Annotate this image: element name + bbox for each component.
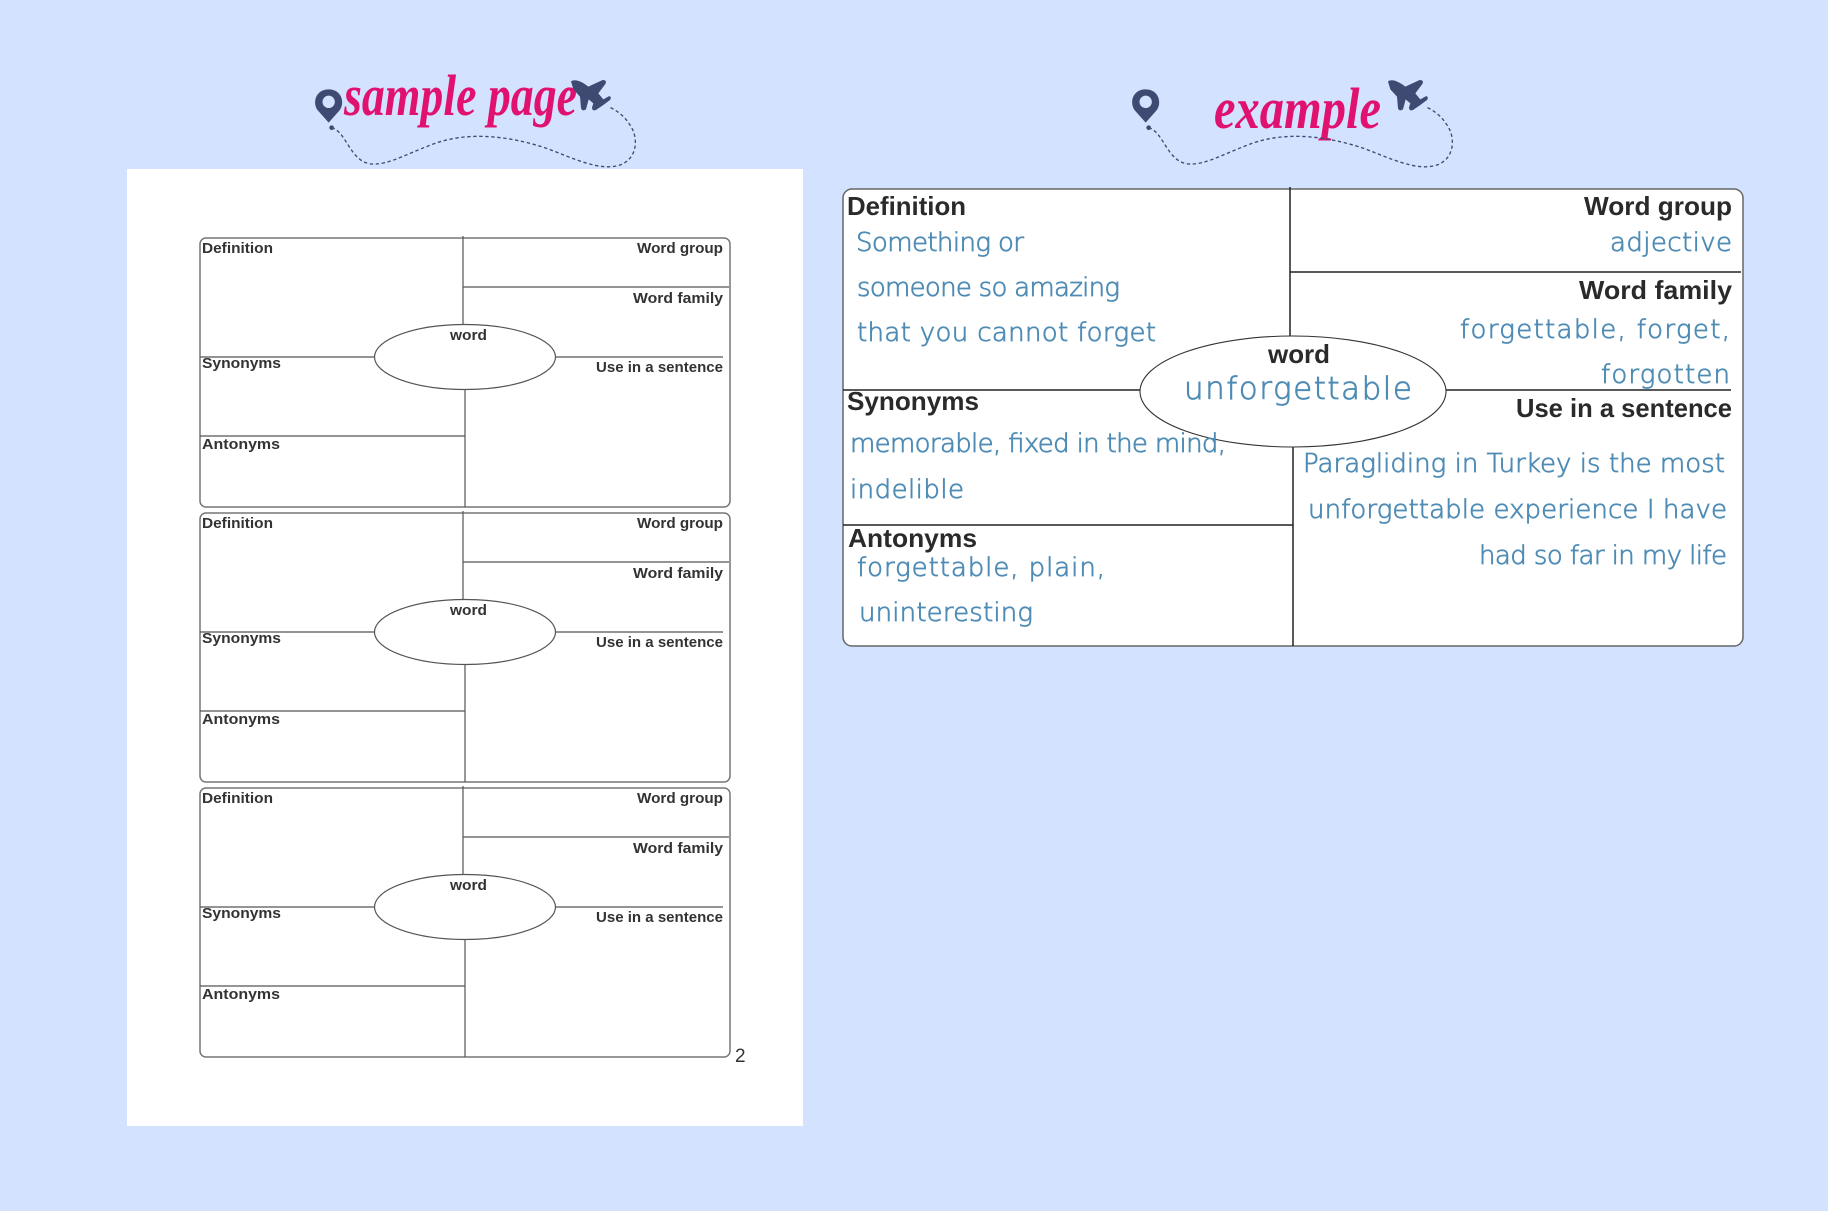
worksheet form 1: Word family [633,290,724,307]
worksheet form 1: word [449,327,487,344]
title: example: example [1214,76,1381,141]
section: word family: forgotten [1601,360,1730,390]
section: antonyms: uninteresting [859,598,1033,628]
worksheet form 2: Word family [633,565,724,582]
worksheet form 3: Antonyms [202,986,280,1003]
section: word group [1584,191,1732,258]
section: word family: Word family [1579,275,1733,305]
section: word family: forgettable, forget, [1460,315,1730,345]
section: definition [847,191,1156,348]
worksheet form 3 [200,786,730,1057]
worksheet form 2: Use in a sentence [596,634,723,651]
section: use in a sentence: Use in a sentence [1516,393,1732,423]
section: use in a sentence: had so far in my life [1479,541,1727,571]
section: word group: adjective [1610,228,1732,258]
worksheet form 3: Word group [637,790,723,807]
section: use in a sentence [1303,393,1732,571]
worksheet form 1 [200,236,730,507]
worksheet form 1: Antonyms [202,436,280,453]
panel: sample page sheet [127,169,803,1126]
section: synonyms [847,386,1226,505]
worksheet form 1: Word group [637,240,723,257]
section: synonyms: indelible [850,475,964,505]
worksheet form 2: Definition [202,515,273,532]
page number: 2 [735,1046,746,1067]
worksheet form 3: Definition [202,790,273,807]
icon: route with pin and plane (sample page) [315,80,635,167]
section: central word: unforgettable [1184,371,1412,407]
worksheet form 2: word [449,602,487,619]
worksheet form 2: Synonyms [202,630,281,647]
section: antonyms [848,523,1105,628]
worksheet form 3: Synonyms [202,905,281,922]
section: word family [1460,275,1733,390]
panel: filled example form [843,187,1743,646]
section: synonyms: memorable, fixed in the mind, [850,429,1226,459]
section: antonyms: Antonyms [848,523,977,553]
section: synonyms: Synonyms [847,386,979,416]
worksheet form 2: Word group [637,515,723,532]
section: definition: someone so amazing [857,273,1120,303]
icon: route with pin and plane (example) [1132,80,1452,167]
worksheet form 1: Use in a sentence [596,359,723,376]
section: definition: Something or [856,228,1024,258]
section: word group: Word group [1584,191,1732,221]
section: use in a sentence: Paragliding in Turkey is the most [1303,449,1725,479]
section: central word: word [1267,339,1330,369]
title: sample page: sample page [343,63,577,128]
worksheet form 2 [200,511,730,782]
worksheet form 3: word [449,877,487,894]
section: antonyms: forgettable, plain, [857,553,1105,583]
worksheet form 3: Use in a sentence [596,909,723,926]
worksheet form 2: Antonyms [202,711,280,728]
section: definition: Definition [847,191,966,221]
worksheet form 3: Word family [633,840,724,857]
worksheet form 1: Synonyms [202,355,281,372]
section: central word [1184,339,1412,407]
worksheet form 1: Definition [202,240,273,257]
section: use in a sentence: unforgettable experience I have [1308,495,1727,525]
section: definition: that you cannot forget [857,318,1156,348]
